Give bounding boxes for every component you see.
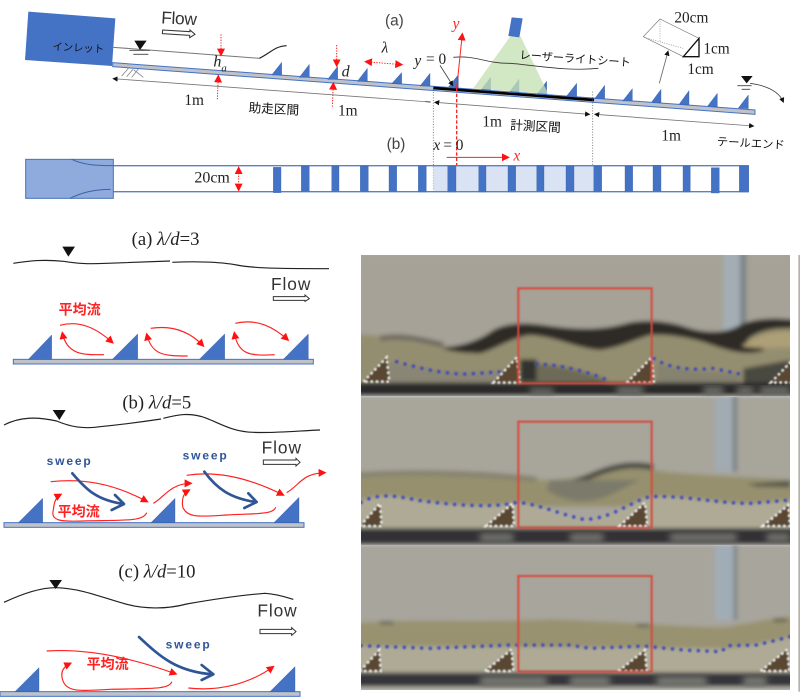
photo column — [357, 248, 800, 693]
mean flow arrows — [51, 473, 325, 521]
panel: flume side view (a) — [25, 7, 785, 192]
width label: 20cm — [194, 170, 230, 187]
heading: (a) λ/d=3 — [132, 229, 199, 250]
label (a): (a) — [385, 13, 404, 30]
rib outlines — [363, 357, 793, 383]
flow label with arrow: Flow — [161, 7, 198, 29]
channel plate — [113, 63, 755, 114]
x = 0 and x axis — [432, 137, 520, 165]
plate and ribs — [0, 667, 300, 696]
length dimension arrows — [113, 79, 753, 126]
red measurement window — [518, 422, 652, 528]
channel outline — [113, 166, 748, 192]
rib dimensions inset: 1cm — [687, 61, 714, 78]
inlet tank — [25, 12, 115, 66]
top specks — [530, 246, 597, 251]
rib dimensions inset — [643, 9, 730, 83]
section labels: 計測区間 — [510, 117, 561, 135]
mean flow label: 平均流 — [59, 301, 101, 317]
rib dimensions inset: 1cm — [703, 40, 730, 57]
sweep arrows: sweep — [47, 454, 91, 468]
flow label with arrow: Flow — [262, 437, 301, 457]
rib outlines — [360, 649, 789, 671]
flow label with arrow: Flow — [257, 601, 297, 621]
depth and spacing symbols: λ — [381, 39, 389, 56]
photo 2: lambda/d=5 — [357, 395, 797, 547]
measurement section bar — [433, 88, 594, 100]
water level marker — [62, 247, 75, 257]
red measurement window — [518, 288, 652, 383]
laser light sheet — [473, 17, 548, 94]
section labels: 助走区間 — [248, 101, 299, 118]
sweep arrow — [139, 637, 213, 680]
flow label with arrow: Flow — [271, 274, 311, 294]
x = 0 and x axis: x — [432, 137, 440, 154]
x = 0 and x axis: = 0 — [443, 137, 464, 154]
heading: (c) λ/d=10 — [118, 562, 195, 583]
water surface — [4, 414, 320, 433]
inlet plan — [26, 159, 113, 198]
slope hatch — [122, 68, 143, 77]
water surface line — [113, 46, 287, 58]
panel: flow pattern (c) lambda/d=10 — [0, 562, 300, 696]
laser sheet label: レーザーライトシート — [519, 49, 631, 69]
mean flow arrows — [60, 322, 288, 356]
flow label with arrow — [257, 601, 297, 635]
depth and spacing symbols — [213, 34, 402, 107]
flow label with arrow — [262, 437, 301, 466]
y axis — [451, 15, 462, 174]
rib dimensions inset: 20cm — [674, 9, 708, 26]
laser sheet label — [453, 49, 631, 69]
panel: flow pattern (b) lambda/d=5 — [4, 392, 325, 527]
submerged bed texture — [530, 387, 790, 395]
rib outlines — [360, 503, 790, 526]
mean flow label: 平均流 — [58, 504, 100, 520]
panel: flume plan view (b) — [26, 136, 748, 198]
sweep arrow: sweep — [166, 637, 210, 651]
section labels: 1m — [661, 127, 681, 144]
mean flow arrows — [47, 651, 273, 690]
depth and spacing symbols: a — [221, 63, 227, 74]
y = 0 label: y — [412, 52, 421, 69]
label (b): (b) — [387, 136, 405, 153]
sweep arrows: sweep — [183, 448, 227, 462]
submerged bed texture — [480, 533, 790, 542]
inlet tank: インレット — [52, 42, 104, 56]
water level marker — [53, 410, 66, 420]
plate and ribs — [13, 334, 313, 364]
right edge sliver — [798, 255, 800, 692]
plate and ribs — [4, 497, 304, 527]
section boundaries — [433, 89, 593, 192]
width label — [194, 168, 239, 190]
ribs in plan — [273, 165, 748, 193]
water surface — [4, 588, 293, 608]
section labels: テールエンド — [717, 136, 785, 152]
y = 0 label: = 0 — [426, 51, 446, 68]
section labels — [184, 92, 785, 152]
section labels: 1m — [338, 103, 358, 120]
y axis: y — [451, 15, 460, 32]
mean flow label: 平均流 — [87, 656, 129, 672]
x = 0 and x axis: x — [512, 148, 520, 165]
section labels: 1m — [482, 113, 502, 130]
photo 3: lambda/d=10 — [357, 543, 797, 693]
submerged bed texture — [480, 677, 767, 686]
triangular ribs — [272, 62, 748, 109]
measured bed dots — [361, 637, 790, 652]
panel: flow pattern (a) lambda/d=3 — [13, 229, 329, 364]
water surface — [13, 260, 329, 269]
photo 1: lambda/d=3 — [357, 252, 797, 400]
y = 0 label — [412, 51, 453, 85]
sweep arrows — [47, 448, 257, 510]
measured bed dots — [397, 359, 740, 380]
depth and spacing symbols: h — [213, 54, 221, 71]
section labels: 1m — [184, 92, 204, 109]
red measurement window — [518, 576, 652, 672]
tail water level — [737, 76, 783, 102]
measurement zone — [433, 166, 593, 192]
water level marker — [129, 41, 150, 54]
depth and spacing symbols: d — [342, 64, 351, 81]
heading: (b) λ/d=5 — [122, 392, 191, 413]
water level marker — [49, 580, 62, 589]
measured bed dots — [361, 496, 790, 519]
